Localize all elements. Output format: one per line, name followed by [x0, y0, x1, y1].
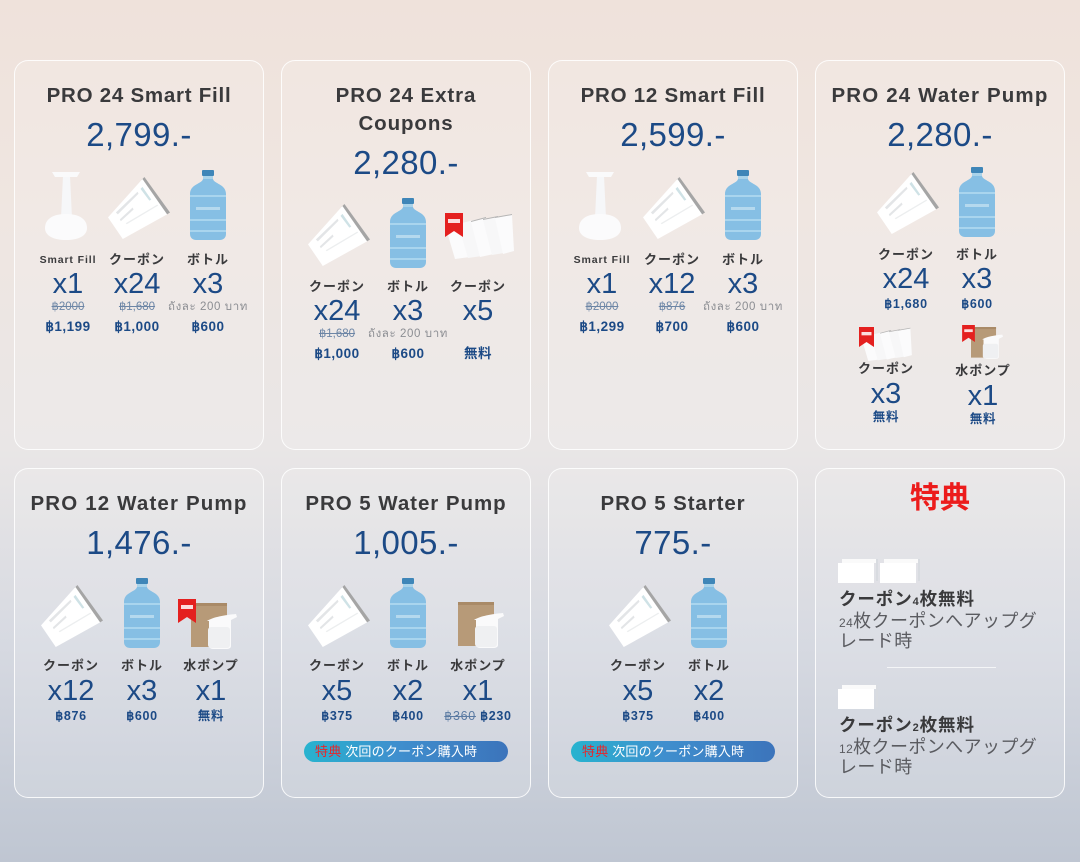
item: water pump: x1 [463, 675, 493, 707]
item: bottle [387, 578, 429, 723]
item: bottle: x3 [393, 295, 423, 327]
item: bottle: x3 [728, 268, 758, 300]
heading: PRO 12 Smart Fill [581, 84, 765, 107]
panel: PRO 12 Water Pump [14, 468, 264, 798]
heading: PRO 24 Smart Fill [47, 84, 231, 107]
benefit pill [571, 741, 775, 762]
item: bottle: ボトル [387, 658, 429, 673]
item: coupons [609, 585, 671, 723]
benefit pill [304, 741, 508, 762]
item: water pump [444, 602, 512, 723]
price: 1,476.- [86, 524, 192, 561]
item: water pump: 水ポンプ [450, 658, 506, 673]
heading: PRO 24 Water Pump [831, 84, 1048, 107]
item: Smart Fill [40, 172, 96, 334]
heading [336, 84, 476, 135]
heading: PRO 12 Water Pump [30, 492, 248, 515]
price: 2,799.- [86, 116, 192, 153]
panel: PRO 24 Smart Fill [14, 60, 264, 450]
panel: PRO 5 Starter [548, 468, 798, 798]
item: coupons: x24 [114, 268, 160, 300]
item: coupons: クーポン [878, 247, 934, 262]
item: Smart Fill: Smart Fill [40, 254, 96, 266]
item: coupons: クーポン [309, 279, 365, 294]
item: bottle: ถังละ 200 บาท [703, 301, 783, 313]
item: coupons: x12 [649, 268, 695, 300]
item: free coupons: 無料 [873, 410, 899, 424]
benefit pill: 特典 次回のクーポン購入時 [582, 744, 744, 759]
item: free water pump: 無料 [198, 709, 224, 723]
item: Smart Fill: Smart Fill [574, 254, 630, 266]
benefit 2 title: クーポン2枚無料 [839, 715, 975, 735]
item: bottle: ฿600 [126, 709, 158, 723]
panel: PRO 24 Extra Coupons [281, 60, 531, 450]
item: free water pump: 水ポンプ [183, 658, 239, 673]
panel: PRO 12 Smart Fill [548, 60, 798, 450]
item: bottle: ฿600 [961, 297, 993, 311]
item: bottle [121, 578, 163, 723]
item: Smart Fill [574, 172, 630, 334]
heading: benefits: 特典 [910, 482, 970, 515]
item: free coupons [858, 327, 914, 424]
item: bottle [368, 198, 448, 361]
price: 775.- [634, 524, 712, 561]
item: bottle: ボトル [956, 247, 998, 262]
item: bottle: ボトル [121, 658, 163, 673]
item: bottle [168, 170, 248, 334]
item: free water pump: x1 [968, 380, 998, 412]
item: bottle: ボトル [387, 279, 429, 294]
item: bottle: ボトル [688, 658, 730, 673]
item: bottle: x2 [393, 675, 423, 707]
panel: PRO 24 Water Pump [815, 60, 1065, 450]
price: 2,280.- [353, 144, 459, 181]
panel: benefits [815, 468, 1065, 798]
item: bottle: x3 [127, 675, 157, 707]
item: coupons: クーポン [309, 658, 365, 673]
item: bottle: ถังละ 200 บาท [368, 328, 448, 340]
panel: PRO 24 Extra Coupons: ฿600 [391, 346, 425, 361]
item: free coupons: クーポン [858, 361, 914, 376]
icon: four coupons [838, 559, 920, 583]
item: Smart Fill: ฿2000 [586, 301, 618, 313]
panel: PRO 5 Water Pump [281, 468, 531, 798]
item: free coupons: x5 [463, 295, 493, 327]
heading: PRO 24 Extra [336, 84, 476, 107]
item: bottle: x3 [962, 263, 992, 295]
item: coupons [643, 177, 705, 334]
item: coupons: ฿375 [622, 709, 654, 723]
item: coupons [308, 204, 370, 361]
item: bottle: x2 [694, 675, 724, 707]
item: free water pump: 無料 [970, 412, 996, 426]
item: free water pump: 水ポンプ [955, 363, 1011, 378]
item: coupons: クーポン [610, 658, 666, 673]
item: coupons: ฿1,680 [119, 301, 155, 313]
panel: PRO 24 Extra Coupons: ฿1,000 [314, 346, 360, 361]
heading: PRO 5 Water Pump [305, 492, 507, 515]
item: Smart Fill: x1 [587, 268, 617, 300]
item: free coupons: クーポン [450, 279, 506, 294]
item: coupons [108, 177, 170, 334]
item: coupons: クーポン [109, 252, 165, 267]
price: 2,280.- [887, 116, 993, 153]
item: free coupons: x3 [871, 378, 901, 410]
panel: PRO 12 Smart Fill: ฿600 [726, 319, 760, 334]
item: bottle: ボトル [722, 252, 764, 267]
item: bottle [688, 578, 730, 723]
panel: PRO 24 Smart Fill: ฿1,000 [114, 319, 160, 334]
benefit 1 title: クーポン4枚無料 [839, 589, 975, 609]
benefit 2 description: 12枚クーポンへアップグレード時 [839, 737, 1037, 777]
item: coupons: クーポン [43, 658, 99, 673]
item: free water pump [178, 599, 239, 723]
item: free water pump: x1 [196, 675, 226, 707]
item: coupons: ฿876 [55, 709, 87, 723]
item: coupons: ฿1,680 [884, 297, 928, 311]
item: coupons: x12 [48, 675, 94, 707]
item: free coupons [445, 213, 514, 361]
icon: two coupons [838, 685, 876, 709]
item: coupons: x5 [623, 675, 653, 707]
item: bottle: ボトル [187, 252, 229, 267]
item: coupons: クーポン [644, 252, 700, 267]
item: bottle: ฿400 [392, 709, 424, 723]
panel: PRO 24 Smart Fill: ฿600 [191, 319, 225, 334]
item: bottle [703, 170, 783, 334]
item: coupons: ฿375 [321, 709, 353, 723]
item: Smart Fill: ฿2000 [52, 301, 84, 313]
panel: PRO 12 Smart Fill: ฿700 [655, 319, 689, 334]
item: coupons: ฿876 [659, 301, 685, 313]
item: free water pump [955, 325, 1011, 426]
item: coupons [308, 585, 370, 723]
item: coupons: x24 [314, 295, 360, 327]
heading: Coupons [358, 112, 454, 135]
item: coupons [877, 172, 939, 311]
price: 2,599.- [620, 116, 726, 153]
item: bottle: ฿400 [693, 709, 725, 723]
panel: PRO 24 Extra Coupons: 無料 [464, 346, 492, 361]
item: bottle: ถังละ 200 บาท [168, 301, 248, 313]
heading: PRO 5 Starter [600, 492, 746, 515]
item: coupons: x5 [322, 675, 352, 707]
item: bottle: x3 [193, 268, 223, 300]
benefit 1 description: 24枚クーポンへアップグレード時 [839, 611, 1037, 651]
item: Smart Fill: x1 [53, 268, 83, 300]
price: 1,005.- [353, 524, 459, 561]
item: water pump: ฿360 ฿230 [444, 709, 512, 723]
panel: PRO 24 Smart Fill: ฿1,199 [45, 319, 91, 334]
benefit pill: 特典 次回のクーポン購入時 [315, 744, 477, 759]
item: coupons: ฿1,680 [319, 328, 355, 340]
item: coupons [41, 585, 103, 723]
item: bottle [956, 167, 998, 311]
item: coupons: x24 [883, 263, 929, 295]
panel: PRO 12 Smart Fill: ฿1,299 [579, 319, 625, 334]
